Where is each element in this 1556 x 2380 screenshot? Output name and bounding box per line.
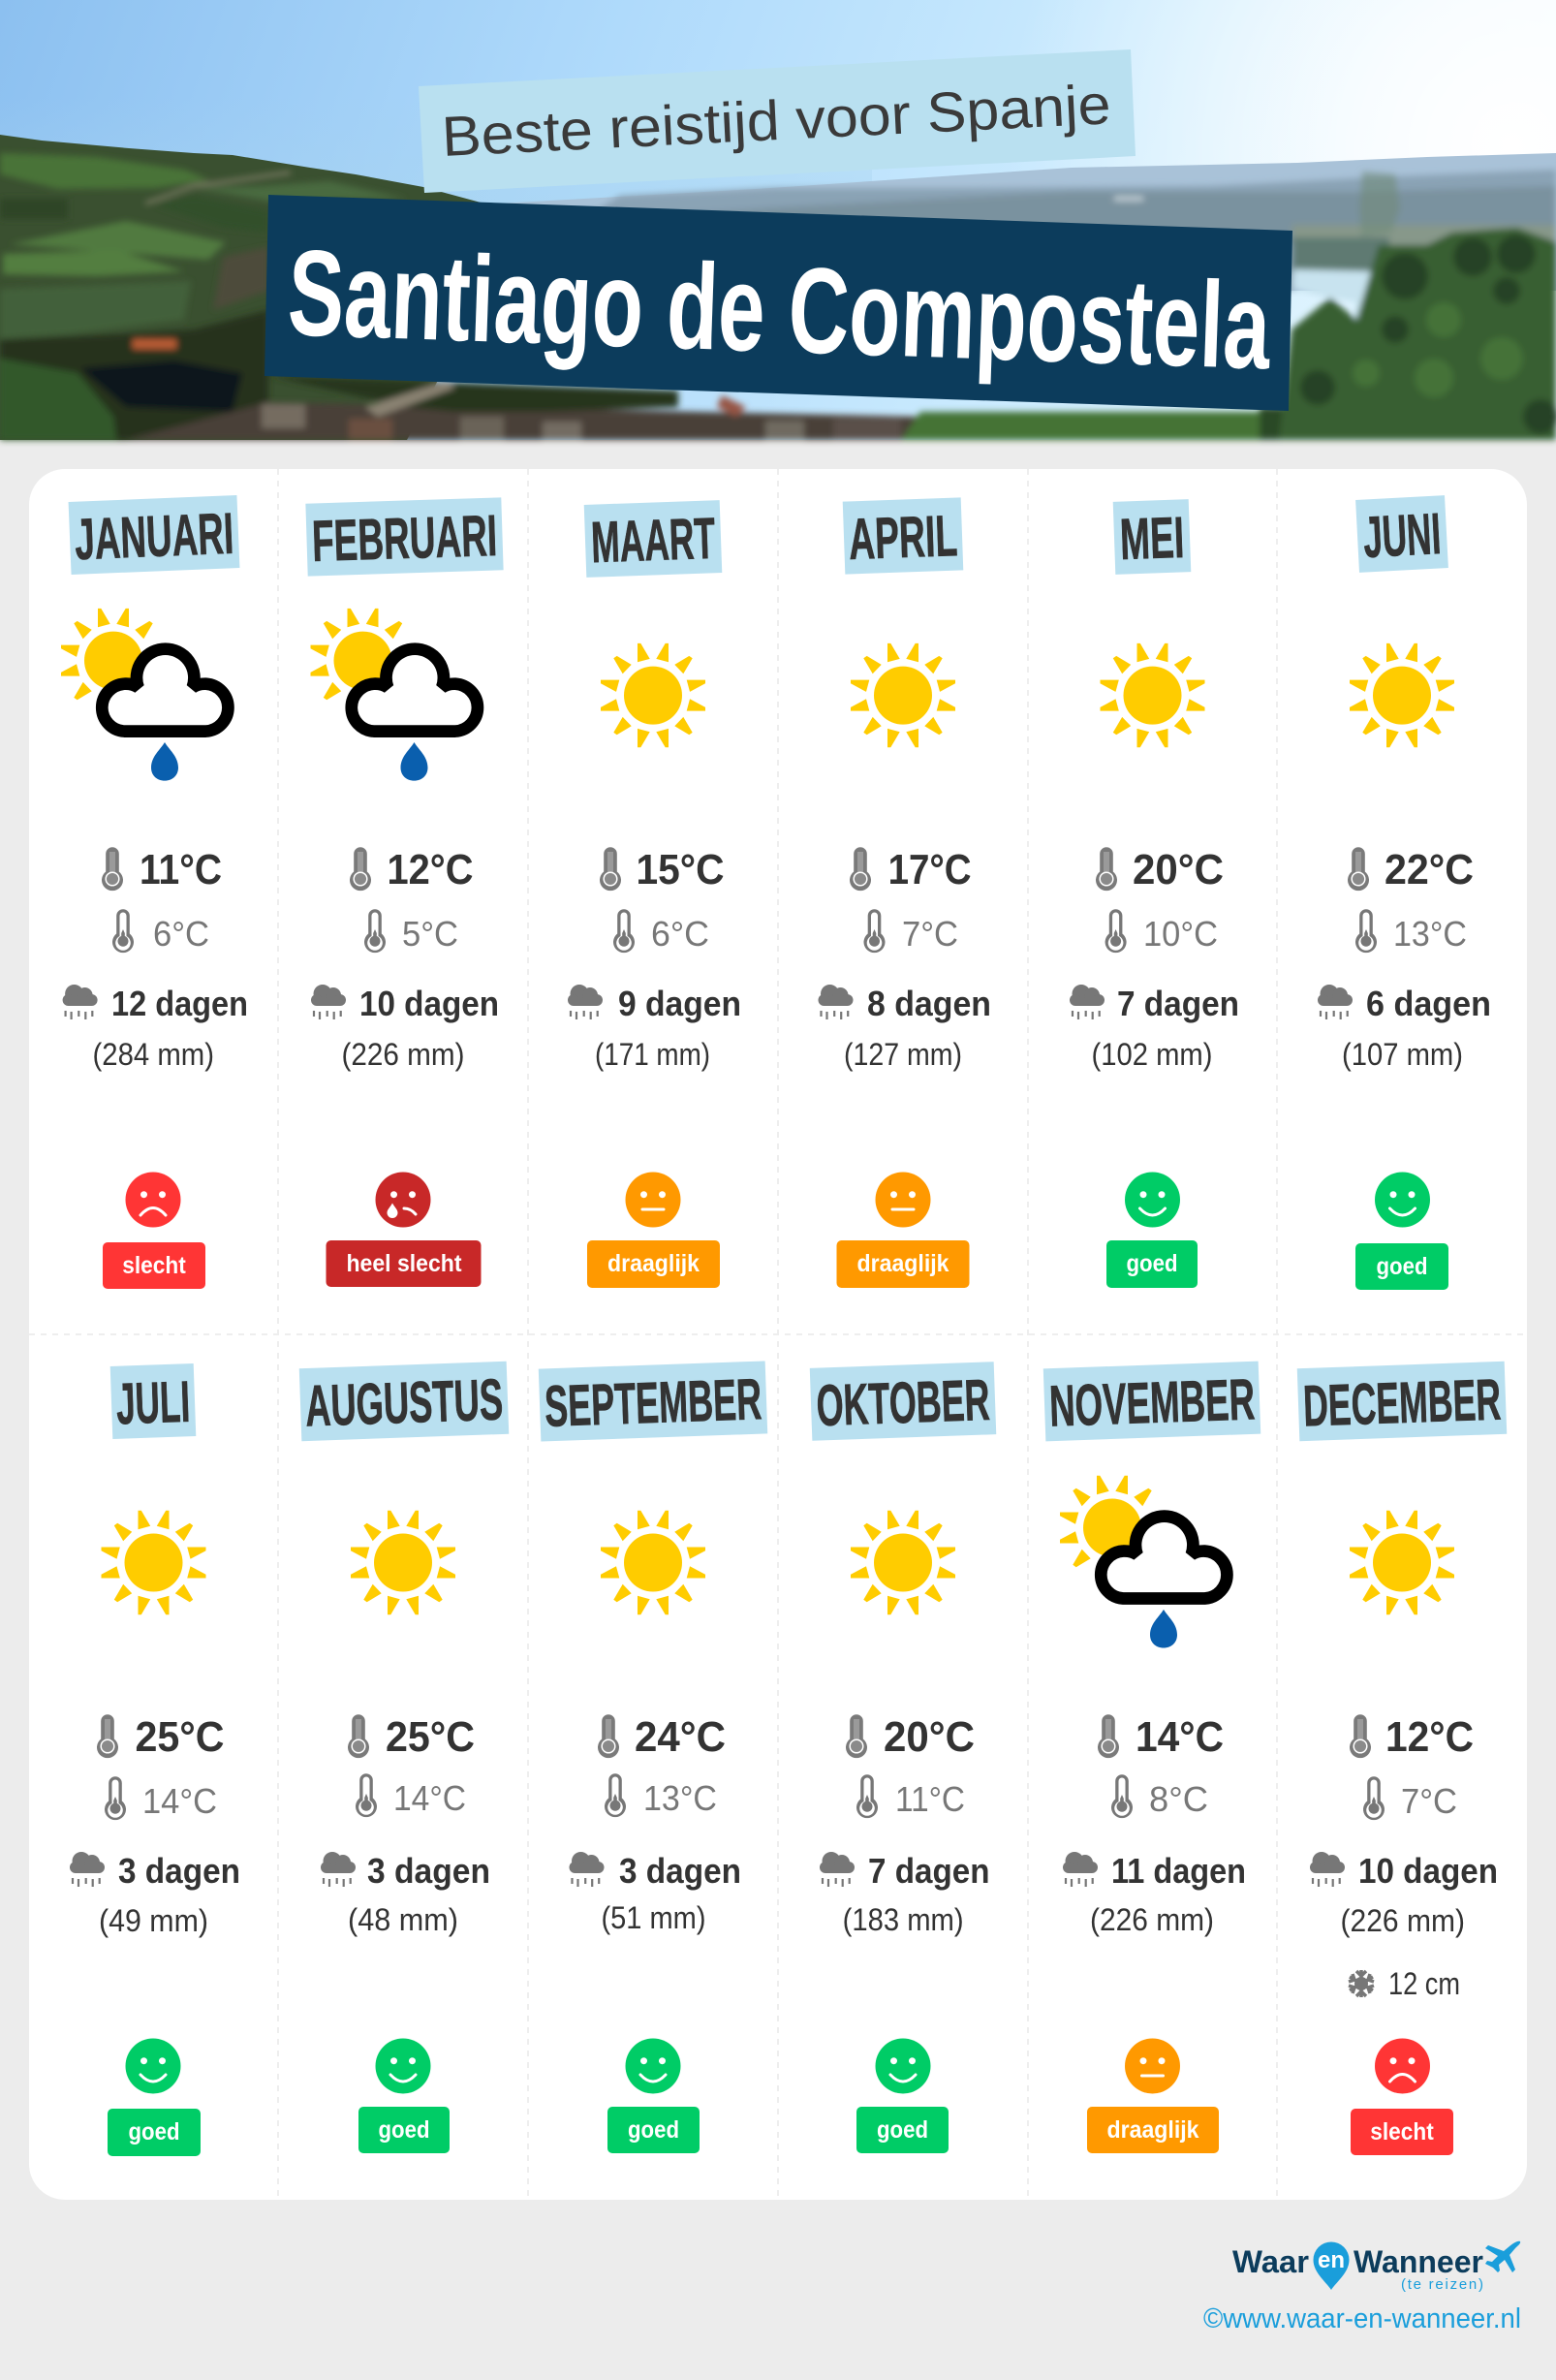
icon: sun and cloud with rain [1060, 1476, 1227, 1647]
heading: februari: FEBRUARI [311, 503, 498, 574]
max temperature [1348, 846, 1474, 893]
min temperature: 6°C [153, 914, 209, 954]
rainfall: (48 mm) [348, 1902, 458, 1937]
badge: goed [607, 2107, 700, 2153]
heading: februari [305, 497, 504, 577]
month: september [539, 1361, 767, 2153]
badge: slecht [103, 1242, 205, 1289]
rain days: 3 dagen [619, 1851, 741, 1891]
rain days: 3 dagen [367, 1851, 490, 1891]
subtitle banner: Beste reistijd voor Spanje [440, 73, 1112, 169]
max temperature: 17°C [888, 846, 972, 893]
icon: sun and cloud with rain [61, 609, 228, 781]
max temperature: 14°C [1136, 1713, 1224, 1761]
max temperature [846, 1713, 975, 1761]
min temperature: 7°C [902, 914, 958, 954]
badge: goed [1106, 1240, 1198, 1288]
heading: juli [110, 1363, 196, 1439]
rainfall: (102 mm) [1091, 1037, 1213, 1072]
heading: juni [1355, 495, 1448, 573]
rainfall: (49 mm) [99, 1903, 208, 1938]
max temperature: 20°C [1133, 846, 1224, 893]
max temperature: 25°C [386, 1713, 475, 1761]
icon: sun [851, 643, 955, 747]
rain days [818, 984, 991, 1023]
logo: Waar en Wanneer: (te reizen) [1401, 2276, 1483, 2293]
logo: Waar en Wanneer [1232, 2241, 1520, 2293]
rain days: 3 dagen [118, 1851, 240, 1891]
max temperature: 11°C [140, 846, 222, 893]
subtitle banner [419, 49, 1136, 193]
badge: goed: goed [128, 2118, 180, 2145]
min temperature: 5°C [402, 914, 458, 954]
rain days: 12 dagen [111, 984, 248, 1023]
rain days [1318, 984, 1491, 1023]
icon: rating face [376, 2039, 430, 2093]
icon: sun [1101, 643, 1205, 747]
min temperature: 7°C [1401, 1781, 1457, 1821]
icon: rating face [1125, 2039, 1180, 2093]
icon: rating face [126, 1173, 180, 1227]
icon: rating face [626, 2039, 680, 2093]
max temperature [1098, 1713, 1224, 1761]
max temperature [102, 846, 222, 893]
rain days [568, 984, 741, 1023]
min temperature [364, 909, 458, 954]
month: februari [305, 497, 504, 1287]
rainfall: (226 mm) [1341, 1903, 1465, 1938]
month: november [1043, 1362, 1260, 2153]
rainfall: (51 mm) [601, 1900, 705, 1935]
month: juli [70, 1363, 240, 2156]
heading: maart: MAART [590, 506, 716, 575]
min temperature: 8°C [1149, 1779, 1208, 1819]
min temperature [1105, 909, 1218, 954]
min temperature [112, 909, 209, 954]
icon: sun [1350, 1511, 1454, 1614]
min temperature: 13°C [1393, 914, 1467, 954]
rain days [1310, 1851, 1498, 1891]
badge: heel slecht: heel slecht [347, 1250, 462, 1277]
max temperature [600, 846, 725, 893]
hero photo: vineyard hills and valley landscape [0, 0, 1556, 440]
month: maart [568, 500, 741, 1288]
snowfall [1349, 1966, 1460, 2001]
rain days [321, 1851, 490, 1891]
rainfall: (183 mm) [843, 1902, 964, 1937]
heading: mei [1113, 499, 1191, 575]
rain days [311, 984, 499, 1023]
badge: draaglijk [587, 1240, 720, 1288]
icon: sun [601, 1511, 705, 1614]
badge: goed: goed [378, 2116, 430, 2144]
heading: mei: MEI [1119, 505, 1185, 572]
max temperature: 24°C [635, 1713, 726, 1761]
icon: sun [1350, 643, 1454, 747]
badge: goed [856, 2107, 949, 2153]
min temperature [1111, 1774, 1208, 1819]
max temperature [1096, 846, 1224, 893]
rain days: 8 dagen [867, 984, 991, 1023]
website credit: ©www.waar-en-wanneer.nl [1203, 2303, 1521, 2334]
month: juni [1318, 495, 1491, 1290]
heading: januari [69, 495, 239, 575]
icon: airplane [1485, 2241, 1520, 2272]
heading: april: APRIL [848, 503, 958, 572]
heading: november: NOVEMBER [1048, 1366, 1256, 1439]
badge: heel slecht [326, 1240, 481, 1287]
badge: slecht: slecht [122, 1252, 186, 1279]
logo: Waar en Wanneer: Waar [1232, 2244, 1309, 2279]
min temperature [605, 1773, 717, 1818]
badge: draaglijk [837, 1240, 969, 1288]
panel: monthly climate card [29, 469, 1527, 2200]
max temperature [598, 1713, 726, 1761]
heading: november [1043, 1362, 1260, 1441]
min temperature [613, 909, 709, 954]
logo: Waar en Wanneer: Wanneer [1354, 2244, 1483, 2279]
max temperature [348, 1713, 475, 1761]
rainfall: (171 mm) [595, 1037, 710, 1072]
badge: draaglijk: draaglijk [1106, 2116, 1199, 2144]
icon: map pin [1314, 2242, 1349, 2290]
rainfall: (226 mm) [341, 1037, 465, 1072]
min temperature [1355, 909, 1467, 954]
max temperature: 20°C [884, 1713, 975, 1761]
heading: augustus [299, 1362, 509, 1441]
min temperature [1363, 1776, 1457, 1821]
rainfall: (127 mm) [844, 1037, 962, 1072]
max temperature: 15°C [636, 846, 725, 893]
min temperature: 11°C [895, 1779, 965, 1819]
icon: sun [101, 1511, 205, 1614]
icon: sun [601, 643, 705, 747]
rainfall: (226 mm) [1090, 1902, 1214, 1937]
heading: april [843, 497, 963, 575]
max temperature [97, 1713, 225, 1761]
icon: rating face [1375, 2039, 1430, 2093]
icon: rating face [126, 2039, 180, 2093]
heading: september [539, 1361, 767, 1442]
max temperature [1350, 1713, 1474, 1761]
min temperature: 14°C [393, 1778, 466, 1818]
heading: september: SEPTEMBER [544, 1366, 762, 1439]
min temperature: 10°C [1143, 914, 1218, 954]
rain days [63, 984, 248, 1023]
heading: augustus: AUGUSTUS [304, 1366, 504, 1439]
badge: draaglijk: draaglijk [607, 1250, 700, 1277]
badge: goed [1355, 1243, 1448, 1290]
badge: goed: goed [628, 2116, 679, 2144]
badge: slecht [1351, 2109, 1453, 2155]
rain days [1063, 1851, 1246, 1891]
snowfall: 12 cm [1388, 1966, 1460, 2001]
badge: goed: goed [1126, 1250, 1178, 1277]
icon: sun [851, 1511, 955, 1614]
icon: rating face [876, 1173, 930, 1227]
rain days: 7 dagen [868, 1851, 990, 1891]
rain days [570, 1851, 741, 1891]
rain days [1070, 984, 1239, 1023]
month: december [1297, 1362, 1507, 2155]
min temperature: 6°C [651, 914, 709, 954]
heading: juli: JULI [115, 1369, 191, 1436]
badge: slecht: slecht [1370, 2118, 1434, 2145]
rain days: 7 dagen [1117, 984, 1239, 1023]
month: augustus [299, 1362, 509, 2153]
min temperature: 13°C [643, 1778, 717, 1818]
badge: draaglijk: draaglijk [856, 1250, 949, 1277]
month: januari [61, 495, 248, 1289]
rain days: 11 dagen [1111, 1851, 1246, 1891]
max temperature [850, 846, 972, 893]
icon: sun and cloud with rain [310, 609, 478, 781]
heading: januari: JANUARI [74, 501, 234, 572]
rain days [70, 1851, 240, 1891]
rainfall: (107 mm) [1342, 1037, 1463, 1072]
rain days: 10 dagen [1358, 1851, 1498, 1891]
max temperature: 25°C [136, 1713, 225, 1761]
heading: juni: JUNI [1361, 501, 1443, 570]
icon: rating face [876, 2039, 930, 2093]
icon: rating face [1125, 1173, 1180, 1227]
rain days: 6 dagen [1366, 984, 1491, 1023]
badge: goed [358, 2107, 450, 2153]
rain days: 10 dagen [359, 984, 499, 1023]
max temperature: 12°C [1385, 1713, 1474, 1761]
min temperature [856, 1774, 965, 1819]
icon: map pin: en [1318, 2247, 1345, 2273]
icon: rating face [1375, 1173, 1430, 1227]
min temperature [864, 909, 958, 954]
rainfall: (284 mm) [93, 1037, 214, 1072]
heading: oktober: OKTOBER [815, 1367, 991, 1438]
min temperature [356, 1773, 466, 1818]
rain days: 9 dagen [618, 984, 741, 1023]
icon: rating face [626, 1173, 680, 1227]
heading: oktober [810, 1362, 996, 1441]
heading: maart [584, 500, 722, 578]
title banner [265, 195, 1292, 411]
max temperature [350, 846, 473, 893]
month: mei [1070, 499, 1239, 1288]
badge: goed: goed [877, 2116, 928, 2144]
icon: sun [351, 1511, 455, 1614]
month: april [818, 497, 991, 1288]
rain days [820, 1851, 990, 1891]
badge: goed [108, 2109, 201, 2156]
max temperature: 22°C [1385, 846, 1474, 893]
min temperature: 14°C [142, 1781, 217, 1821]
min temperature [105, 1776, 217, 1821]
icon: rating face [376, 1173, 430, 1227]
badge: draaglijk [1087, 2107, 1219, 2153]
badge: goed: goed [1376, 1253, 1428, 1280]
month: oktober [810, 1362, 996, 2153]
max temperature: 12°C [388, 846, 473, 893]
